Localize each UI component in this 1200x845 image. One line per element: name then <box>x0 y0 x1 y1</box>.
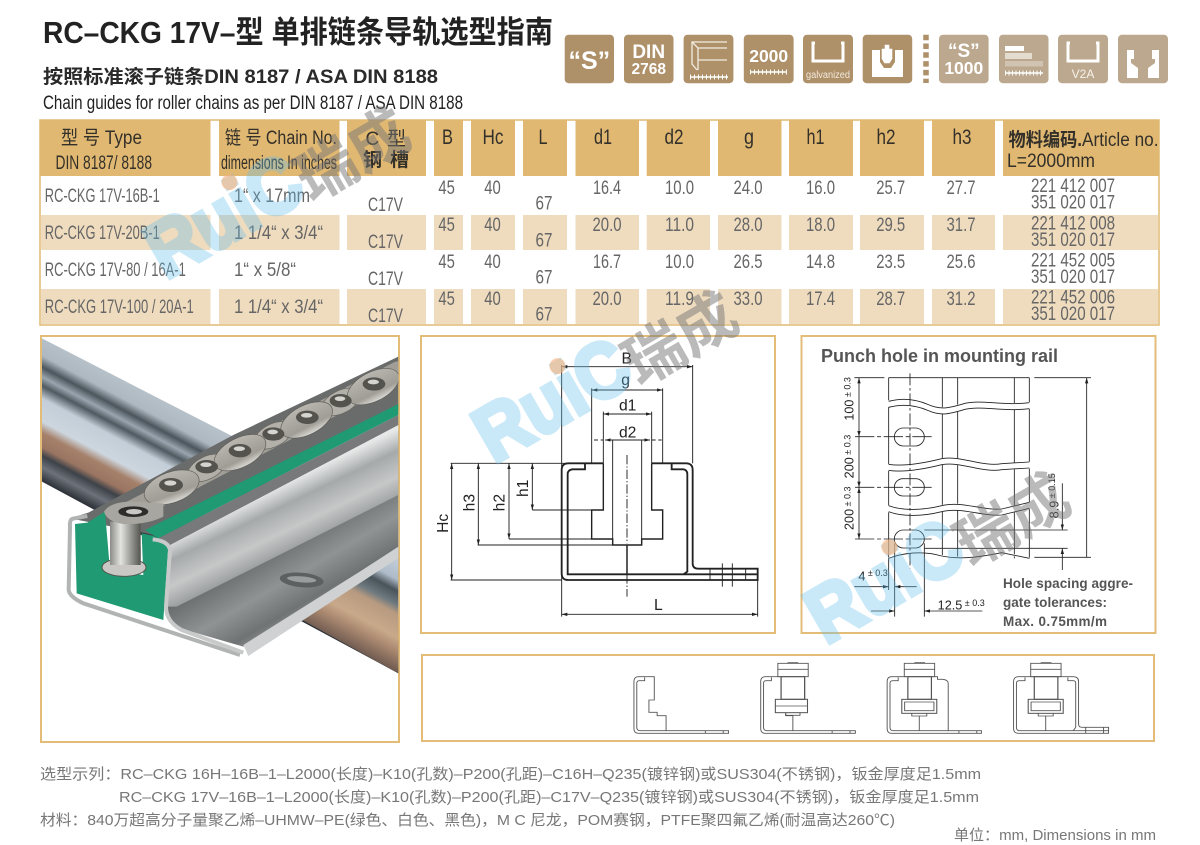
dimension labels: B <box>621 350 632 367</box>
variant 2 <box>761 663 855 733</box>
table header labels: L=2000mm <box>1007 151 1095 172</box>
table row 1: 24.0 <box>734 178 762 199</box>
table header labels: dimensions In inches <box>221 153 337 174</box>
table row 1 <box>45 176 1115 216</box>
table row 2 <box>45 214 1115 253</box>
table row 1: 25.7 <box>876 178 905 199</box>
table row 4: 1 1/4“ x 3/4“ <box>234 297 323 318</box>
table row 3: C17V <box>368 269 403 290</box>
table header labels: DIN 8187/ 8188 <box>56 153 152 174</box>
table row 4: 11.9 <box>665 289 694 310</box>
table header cells <box>40 120 1159 176</box>
variant 1 <box>634 677 729 733</box>
table row 3: 25.6 <box>946 252 976 273</box>
tolerance labels <box>842 377 1061 612</box>
table header labels: h3 <box>952 126 972 149</box>
icon: S 1000: 1000 <box>944 58 984 78</box>
table header labels: 型 号 Type <box>61 127 142 149</box>
dimension labels: h2 <box>492 494 509 511</box>
icon: block in channel <box>863 35 912 83</box>
hole spacing note <box>1003 576 1133 629</box>
punch hole frame <box>802 336 1156 633</box>
icon: V2A <box>1058 35 1108 83</box>
panel: profile variants <box>422 655 1154 741</box>
photo: chain guide rail <box>42 338 405 673</box>
variants frame <box>422 655 1154 741</box>
icon: S 1000: “S” <box>948 41 980 62</box>
table <box>40 120 1159 327</box>
table row 2: RC-CKG 17V-20B-1 <box>45 223 160 244</box>
watermark 3 <box>790 442 1081 661</box>
dimension labels: g <box>621 372 630 389</box>
hole spacing note: Hole spacing aggre- <box>1003 576 1133 591</box>
units note: 单位：mm, Dimensions in mm <box>954 827 1156 844</box>
table row 4: 17.4 <box>806 289 835 310</box>
tolerance labels: 4 <box>858 570 865 584</box>
variant 4 <box>1014 663 1109 733</box>
table row 3: 14.8 <box>806 252 835 273</box>
watermark 2: 瑞成 <box>612 280 749 398</box>
dimension labels: Hc <box>435 514 452 533</box>
tolerance labels: ± 0.3 <box>842 486 852 509</box>
watermark 1 <box>130 77 421 296</box>
watermark 1: RuiC <box>130 136 317 295</box>
table row 4: RC-CKG 17V-100 / 20A-1 <box>45 297 194 318</box>
table header labels: 链 号 Chain No. <box>225 127 337 149</box>
subtitle english: Chain guides for roller chains as per DIN 8187 / ASA DIN 8188 <box>43 93 463 114</box>
tolerance labels: 200 <box>843 509 857 530</box>
variant profile drawings <box>634 663 1109 733</box>
table row 2: 11.0 <box>665 215 694 236</box>
watermark 1: 瑞成 <box>284 96 421 214</box>
icon: S <box>565 35 614 83</box>
dimension labels: h1 <box>515 480 532 497</box>
cross-section drawing <box>435 350 758 617</box>
table row 3: 26.5 <box>734 252 762 273</box>
table row 3: 16.7 <box>593 252 621 273</box>
table header labels: g <box>744 126 754 149</box>
table row 3: 10.0 <box>665 252 694 273</box>
punch hole drawing <box>842 373 1091 617</box>
table header labels: h2 <box>876 126 896 149</box>
table row 3 <box>45 251 1115 290</box>
tolerance labels: ± 0.15 <box>1047 473 1057 501</box>
table row 1: 67 <box>536 194 552 214</box>
table row 4: 45 <box>438 289 455 310</box>
table row 4: 351 020 017 <box>1031 304 1115 325</box>
title: RC–CKG 17V–型 单排链条导轨选型指南 <box>43 15 553 50</box>
panel: product photo <box>41 336 405 742</box>
table row 3: 221 452 005 <box>1031 251 1115 272</box>
table row 4 <box>45 288 1115 327</box>
icon: split blocks <box>1118 35 1168 83</box>
watermark 2 <box>458 261 749 480</box>
tolerance labels: ± 0.3 <box>865 568 888 578</box>
table row 3: 45 <box>438 252 455 273</box>
dimension frame <box>421 336 775 633</box>
table row 2: 67 <box>536 230 552 252</box>
table header labels <box>56 126 1158 174</box>
table row 1: RC-CKG 17V-16B-1 <box>45 186 160 207</box>
table row 1: 10.0 <box>665 178 694 199</box>
dimension labels: h3 <box>461 494 478 511</box>
table header labels: C 型 <box>366 128 406 150</box>
table row 3: 1“ x 5/8“ <box>234 260 296 281</box>
watermark 2: RuiC <box>458 320 645 479</box>
dimension labels: d2 <box>619 424 636 441</box>
icon: DIN 2768 <box>624 35 674 83</box>
panel: punch hole <box>802 336 1156 633</box>
table row 4: 40 <box>484 289 501 310</box>
table row 2: 29.5 <box>876 215 905 236</box>
table row 1: 40 <box>484 178 501 199</box>
table row 3: 351 020 017 <box>1031 267 1115 288</box>
dimension labels <box>435 350 663 614</box>
materials line: 材料：840万超高分子量聚乙烯–UHMW–PE(绿色、白色、黑色)，M C 尼龙，POM赛钢，PTFE聚四氟乙烯(耐温高达260℃) <box>40 812 895 829</box>
table header labels: B <box>442 126 453 149</box>
table row 4: C17V <box>368 306 403 327</box>
subtitle chinese: 按照标准滚子链条DIN 8187 / ASA DIN 8188 <box>43 65 438 88</box>
table row 1: 351 020 017 <box>1031 193 1115 214</box>
icon: 2000 <box>744 35 794 83</box>
table row 2: 18.0 <box>806 215 835 236</box>
table row 4: 221 452 006 <box>1031 288 1115 309</box>
table row 3: RC-CKG 17V-80 / 16A-1 <box>45 260 186 281</box>
table row 4: 28.7 <box>876 289 905 310</box>
photo frame <box>41 336 399 742</box>
table frame <box>40 120 1159 325</box>
watermark 3: 瑞成 <box>944 461 1081 579</box>
tolerance labels: 12.5 <box>938 598 962 612</box>
table row 1: 221 412 007 <box>1031 176 1115 197</box>
hole spacing note: Max. 0.75mm/m <box>1003 614 1107 629</box>
table row 3: 67 <box>536 268 552 288</box>
tinted row 2 <box>41 215 1158 250</box>
table header labels: Hc <box>482 126 504 149</box>
icon: galvanized <box>803 35 853 83</box>
hole spacing note: gate tolerances: <box>1003 595 1107 610</box>
table row 2: 31.7 <box>946 215 976 236</box>
table header labels: h1 <box>806 126 824 149</box>
table row 1: 27.7 <box>946 178 976 199</box>
table row 2: 351 020 017 <box>1031 230 1115 251</box>
icon: DIN 2768: DIN <box>632 42 665 63</box>
table header labels: L <box>538 126 548 149</box>
table row 2: 1 1/4“ x 3/4“ <box>234 223 323 244</box>
table row 4: 67 <box>536 304 552 326</box>
icon: DIN 2768: 2768 <box>631 61 666 78</box>
table header labels: d2 <box>664 126 684 149</box>
panel: dimension drawing <box>421 336 775 633</box>
icon: galvanized: galvanized <box>806 70 850 81</box>
tolerance labels: ± 0.3 <box>842 377 852 400</box>
icon: 2000: 2000 <box>749 46 788 66</box>
icon row <box>565 35 1168 83</box>
watermark 3: RuiC <box>790 501 977 660</box>
tinted row 4 <box>41 289 1158 324</box>
table row 4: 20.0 <box>592 289 622 310</box>
table header labels: 钢 槽 <box>363 149 409 171</box>
table row 4: 31.2 <box>946 289 976 310</box>
icon: S 1000 <box>939 35 989 83</box>
table row 4: 33.0 <box>734 289 762 310</box>
icon: profile with ruler <box>684 35 733 83</box>
tolerance labels: 200 <box>843 457 857 478</box>
table row 1: 45 <box>438 178 455 199</box>
table row 1: 16.4 <box>593 178 621 199</box>
table row 2: 28.0 <box>734 215 762 236</box>
icon: S: “S” <box>568 47 610 75</box>
table row 3: 40 <box>484 252 501 273</box>
tolerance labels: 100 <box>843 400 857 421</box>
table row 1: 16.0 <box>806 178 835 199</box>
table row 2: 221 412 008 <box>1031 214 1115 235</box>
divider dots <box>923 35 929 83</box>
selection example line 1: 选型示列：RC–CKG 16H–16B–1–L2000(长度)–K10(孔数)–P200(孔距)–C16H–Q235(镀锌钢)或SUS304(不锈钢)，钣金厚度足1.5mm <box>40 766 981 783</box>
icon: bars with ruler <box>999 35 1048 83</box>
table row 2: 20.0 <box>592 215 622 236</box>
dimension labels: d1 <box>619 397 636 414</box>
selection example line 2: RC–CKG 17V–16B–1–L2000(长度)–K10(孔数)–P200(孔距)–C17V–Q235(镀锌钢)或SUS304(不锈钢)，钣金厚度足1.5mm <box>119 789 979 806</box>
variant 3 <box>887 663 981 733</box>
icon: V2A: V2A <box>1072 67 1094 81</box>
table row 1: 1“ x 17mm <box>234 186 310 207</box>
footer notes <box>40 766 1156 844</box>
tolerance labels: ± 0.3 <box>962 598 985 608</box>
table row 1: C17V <box>368 195 403 216</box>
table header labels: 物料编码.Article no. <box>1008 128 1158 151</box>
tolerance labels: 8.9 <box>1047 501 1061 518</box>
table row 3: 23.5 <box>876 252 905 273</box>
punch hole heading: Punch hole in mounting rail <box>821 346 1058 366</box>
table row 2: 45 <box>438 215 455 236</box>
tolerance labels: ± 0.3 <box>842 435 852 457</box>
table header labels: d1 <box>594 126 612 149</box>
table row 2: C17V <box>368 232 403 253</box>
dimension labels: L <box>654 597 663 614</box>
table row 2: 40 <box>484 215 501 236</box>
